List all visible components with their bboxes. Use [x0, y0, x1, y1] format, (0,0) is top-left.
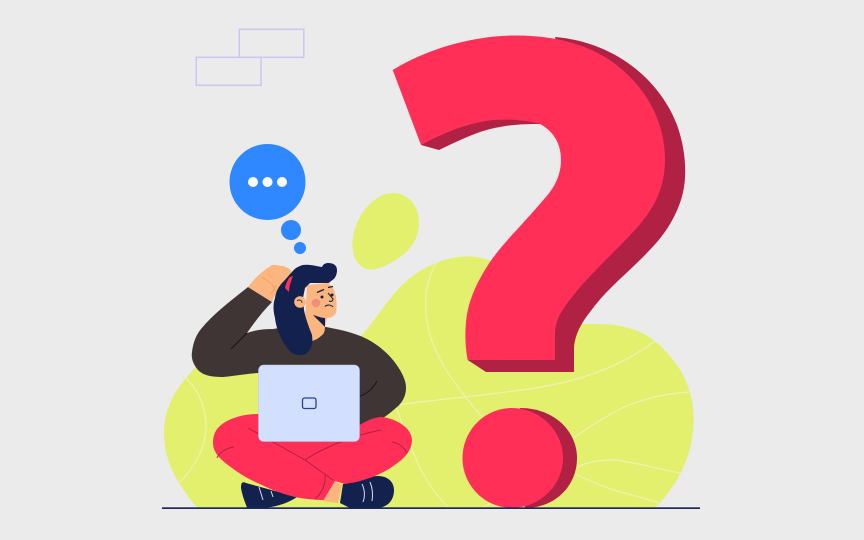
question mark dot	[462, 408, 577, 508]
question mark	[393, 35, 685, 372]
ellipsis dots	[248, 177, 287, 187]
question mark inner shadow	[421, 100, 540, 150]
question mark side shadow	[468, 37, 685, 372]
red hair band	[285, 276, 293, 292]
trouser fold lines	[217, 428, 407, 499]
hand	[248, 265, 292, 302]
blush	[312, 299, 320, 307]
neck shadow hair	[313, 315, 325, 327]
outlined decorative bricks	[196, 29, 304, 85]
right shoe	[340, 476, 394, 508]
sweater	[192, 287, 406, 430]
laptop	[258, 365, 360, 442]
facial features	[317, 286, 333, 307]
ankle	[323, 481, 342, 503]
pink trousers	[213, 414, 412, 500]
blob vein lines	[179, 263, 689, 507]
question mark front	[393, 35, 665, 360]
laptop logo	[302, 398, 316, 408]
ground line	[162, 507, 700, 509]
person	[192, 263, 412, 508]
hair	[274, 263, 337, 355]
ear	[294, 296, 306, 308]
small lime blob	[352, 193, 419, 270]
left shoe	[241, 482, 297, 508]
thought bubble	[230, 144, 306, 254]
neck and face	[305, 283, 337, 341]
large lime background blob	[164, 256, 694, 508]
